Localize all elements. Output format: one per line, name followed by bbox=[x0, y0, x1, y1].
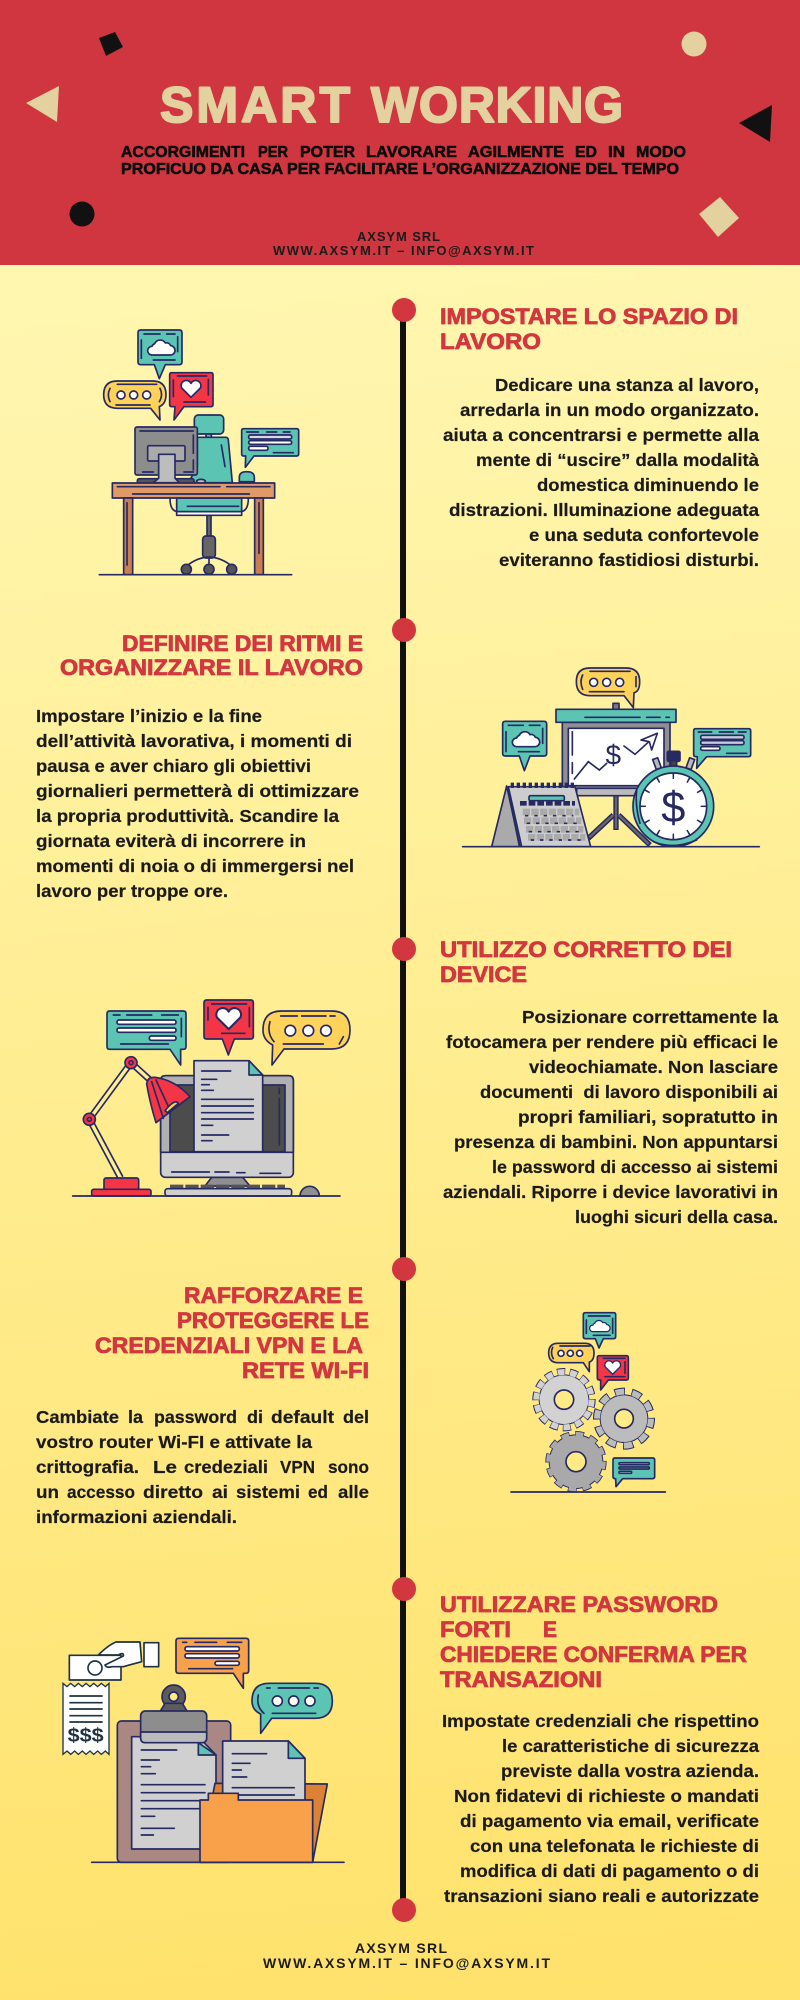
floor bbox=[511, 1489, 665, 1494]
heading: section 2: ORGANIZZARE IL LAVORO bbox=[60, 655, 363, 680]
decorative beige triangle bbox=[26, 86, 59, 122]
text: section 3: propri familiari, sopratutto in bbox=[518, 1107, 778, 1127]
yellow dots bubble bbox=[104, 381, 166, 420]
gear: bottom dark bbox=[548, 1434, 604, 1490]
text: section 1: domestica diminuendo le bbox=[537, 475, 759, 495]
text: section 1 bbox=[443, 375, 759, 570]
title: WORKING bbox=[371, 77, 623, 133]
decorative black diamond bbox=[99, 32, 123, 56]
cloud bubble bbox=[503, 721, 547, 771]
text: section 2: giornalieri permetterà di ottimizzare bbox=[36, 781, 359, 801]
cloud bubble bbox=[138, 330, 182, 379]
red heart bubble bbox=[204, 1000, 253, 1055]
text: section 3: documenti di lavoro disponibili ai bbox=[480, 1082, 778, 1102]
computer bbox=[161, 1076, 293, 1196]
text: section 4: sistemi bbox=[236, 1482, 300, 1502]
presentation board bbox=[556, 703, 676, 845]
teal dots bubble bbox=[252, 1683, 332, 1733]
text: section 4: di bbox=[247, 1407, 263, 1427]
heading: section 1 bbox=[440, 304, 738, 354]
subtitle: POTER bbox=[300, 144, 355, 161]
illustration: presentation, calendar, stopwatch bbox=[463, 668, 759, 847]
text: section 4: ai bbox=[212, 1482, 228, 1502]
illustration: payment documents bbox=[63, 1638, 344, 1862]
heading: section 2: DEFINIRE DEI RITMI E bbox=[122, 631, 363, 656]
gear: medium bbox=[597, 1392, 651, 1446]
footer contact bbox=[263, 1940, 550, 1971]
footer contact: WWW.AXSYM.IT – INFO@AXSYM.IT bbox=[263, 1955, 550, 1971]
red heart bubble bbox=[170, 373, 213, 420]
text: section 2: Impostare l’inizio e la fine bbox=[36, 706, 262, 726]
floor bbox=[463, 844, 759, 849]
subtitle bbox=[121, 144, 686, 178]
heading: section 5: UTILIZZARE PASSWORD bbox=[440, 1592, 718, 1617]
subtitle: ED bbox=[575, 144, 597, 161]
hand with banknote bbox=[69, 1642, 159, 1680]
header band bbox=[0, 0, 800, 265]
heading: section 3: UTILIZZO CORRETTO DEI bbox=[440, 937, 732, 962]
text: section 4: VPN bbox=[280, 1457, 315, 1477]
folder back bbox=[200, 1783, 327, 1862]
text: section 4: del bbox=[343, 1407, 369, 1427]
text: section 3: Posizionare correttamente la bbox=[522, 1007, 778, 1027]
clip bbox=[141, 1711, 207, 1743]
growth chart: $ bbox=[606, 740, 622, 771]
text: section 2 bbox=[36, 706, 359, 901]
text: section 4: ed bbox=[308, 1482, 328, 1502]
text: section 4: informazioni aziendali. bbox=[36, 1507, 237, 1527]
text: section 5: transazioni siano reali e autorizzate bbox=[444, 1886, 759, 1906]
text: section 5: Impostate credenziali che rispettino bbox=[442, 1711, 759, 1731]
heading: section 5: E bbox=[543, 1617, 557, 1642]
text: section 3: fotocamera per rendere più efficaci le bbox=[446, 1032, 778, 1052]
yellow dots bubble bbox=[549, 1343, 594, 1372]
text: section 2: lavoro per troppe ore. bbox=[36, 881, 228, 901]
text: section 4: accesso bbox=[67, 1482, 135, 1502]
subtitle: PROFICUO DA CASA PER FACILITARE L’ORGANIZZAZIONE DEL TEMPO bbox=[121, 161, 679, 178]
text: section 5 bbox=[442, 1711, 759, 1906]
text: section 1: aiuta a concentrarsi e permette alla bbox=[443, 425, 759, 445]
text: section 1: eviteranno fastidiosi disturbi. bbox=[499, 550, 759, 570]
subtitle: MODO bbox=[636, 144, 686, 161]
chair bbox=[170, 415, 248, 574]
yellow dots bubble bbox=[263, 1011, 350, 1065]
heading: section 1: IMPOSTARE LO SPAZIO DI bbox=[440, 304, 738, 329]
heading: section 5: FORTI bbox=[440, 1617, 511, 1642]
text: section 5: modifica di dati di pagamento o di bbox=[460, 1861, 759, 1881]
text: section 5: Non fidatevi di richieste o mandati bbox=[454, 1786, 759, 1806]
text: section 4: diretto bbox=[143, 1482, 203, 1502]
text: section 4: vostro router Wi-FI e attivate la bbox=[36, 1432, 312, 1452]
text: section 3: aziendali. Riporre i device lavorativi in bbox=[443, 1182, 778, 1202]
decorative beige diamond bbox=[699, 197, 739, 237]
text: section 4: crittografia. bbox=[36, 1457, 139, 1477]
monitor bbox=[135, 427, 205, 483]
text: section 4: default bbox=[271, 1407, 334, 1427]
decorative black triangle bbox=[739, 105, 772, 142]
text: section 2: momenti di noia o di immergersi nel bbox=[36, 856, 354, 876]
timeline bbox=[392, 298, 416, 1922]
second document bbox=[223, 1741, 305, 1807]
yellow dots bubble bbox=[576, 668, 640, 708]
header contact: AXSYM SRL bbox=[357, 229, 440, 244]
text bubble bbox=[242, 429, 299, 467]
floor bbox=[73, 1193, 340, 1198]
heading: section 3 bbox=[440, 937, 732, 987]
heading: section 4: CREDENZIALI VPN E LA bbox=[95, 1333, 363, 1358]
calendar bbox=[492, 785, 591, 847]
text: section 4: un bbox=[36, 1482, 59, 1502]
text bubble bbox=[694, 729, 751, 768]
growth chart bbox=[574, 733, 657, 779]
text: section 1: arredarla in un modo organizzato. bbox=[460, 400, 759, 420]
heading: section 5: TRANSAZIONI bbox=[440, 1667, 602, 1692]
receipt bbox=[63, 1683, 109, 1754]
text: section 3: luoghi sicuri della casa. bbox=[575, 1207, 778, 1227]
text: section 4: la bbox=[128, 1407, 143, 1427]
floor bbox=[92, 1860, 344, 1865]
illustration: gears bbox=[511, 1313, 665, 1492]
document bbox=[194, 1061, 263, 1152]
heading: section 4: RAFFORZARE E bbox=[184, 1283, 363, 1308]
cloud bubble bbox=[583, 1313, 616, 1348]
heading: section 3: DEVICE bbox=[440, 962, 527, 987]
text: section 4: sono bbox=[328, 1457, 369, 1477]
heading: section 4: PROTEGGERE LE bbox=[177, 1308, 369, 1333]
header contact: WWW.AXSYM.IT – INFO@AXSYM.IT bbox=[273, 243, 534, 258]
heading: section 5 bbox=[440, 1592, 747, 1692]
text: section 1: e una seduta confortevole bbox=[529, 525, 759, 545]
text: section 1: mente di “uscire” dalla modalità bbox=[476, 450, 759, 470]
text: section 5: le caratteristiche di sicurezza bbox=[502, 1736, 759, 1756]
lamp bbox=[83, 1057, 190, 1196]
document on clipboard bbox=[132, 1737, 216, 1849]
red heart bubble bbox=[597, 1356, 628, 1390]
desk bbox=[112, 483, 275, 575]
text: section 1: distrazioni. Illuminazione adeguata bbox=[449, 500, 759, 520]
folder front bbox=[200, 1793, 313, 1862]
text: section 2: dell’attività lavorativa, i momenti di bbox=[36, 731, 352, 751]
text: section 5: previste dalla vostra azienda. bbox=[501, 1761, 759, 1781]
heading: section 4: RETE WI-FI bbox=[242, 1358, 369, 1383]
heading: section 5: CHIEDERE CONFERMA PER bbox=[440, 1642, 747, 1667]
subtitle: AGILMENTE bbox=[468, 144, 564, 161]
illustration: computer and lamp bbox=[73, 1000, 350, 1196]
gear: large light bbox=[536, 1372, 592, 1427]
subtitle: PER bbox=[258, 144, 288, 161]
text: section 3: videochiamate. Non lasciare bbox=[529, 1057, 778, 1077]
title bbox=[160, 77, 623, 133]
text: section 2: giornata eviterà di incorrere in bbox=[36, 831, 306, 851]
text: section 2: la propria produttività. Scandire la bbox=[36, 806, 339, 826]
text: section 2: pausa e aver chiaro gli obiettivi bbox=[36, 756, 311, 776]
clipboard bbox=[117, 1685, 231, 1862]
text: section 5: con una telefonata le richieste di bbox=[470, 1836, 759, 1856]
text: section 4: alle bbox=[338, 1482, 369, 1502]
stopwatch: $ bbox=[661, 784, 685, 832]
title: SMART bbox=[160, 77, 350, 133]
text bubble bbox=[107, 1011, 186, 1065]
heading: section 2 bbox=[60, 631, 363, 680]
text: section 4: Le bbox=[153, 1457, 177, 1477]
text: section 5: di pagamento via email, verificate bbox=[460, 1811, 759, 1831]
heading: section 1: LAVORO bbox=[440, 329, 541, 354]
mug bbox=[239, 472, 254, 482]
decorative beige circle bbox=[682, 32, 706, 56]
subtitle: ACCORGIMENTI bbox=[121, 144, 245, 161]
text: section 3: presenza di bambini. Non appuntarsi bbox=[454, 1132, 778, 1152]
heading: section 4 bbox=[95, 1283, 369, 1383]
header contact bbox=[273, 229, 534, 258]
text: section 4 bbox=[36, 1407, 369, 1527]
receipt: $$$ bbox=[68, 1726, 104, 1747]
decorative black circle bbox=[70, 202, 94, 226]
mouse bbox=[300, 1186, 319, 1196]
text: section 3: le password di accesso ai sistemi bbox=[492, 1157, 778, 1177]
subtitle: IN bbox=[608, 144, 625, 161]
floor bbox=[99, 572, 292, 577]
stopwatch bbox=[633, 751, 714, 847]
text: section 4: Cambiate bbox=[36, 1407, 119, 1427]
text: section 1: Dedicare una stanza al lavoro, bbox=[495, 375, 759, 395]
orange text bubble bbox=[176, 1638, 249, 1688]
subtitle: LAVORARE bbox=[366, 144, 457, 161]
text: section 4: password bbox=[154, 1407, 237, 1427]
text bubble bbox=[613, 1458, 655, 1487]
footer contact: AXSYM SRL bbox=[355, 1940, 447, 1956]
text: section 3 bbox=[443, 1007, 778, 1227]
illustration: desk workspace bbox=[99, 330, 299, 575]
text: section 4: credeziali bbox=[184, 1457, 268, 1477]
